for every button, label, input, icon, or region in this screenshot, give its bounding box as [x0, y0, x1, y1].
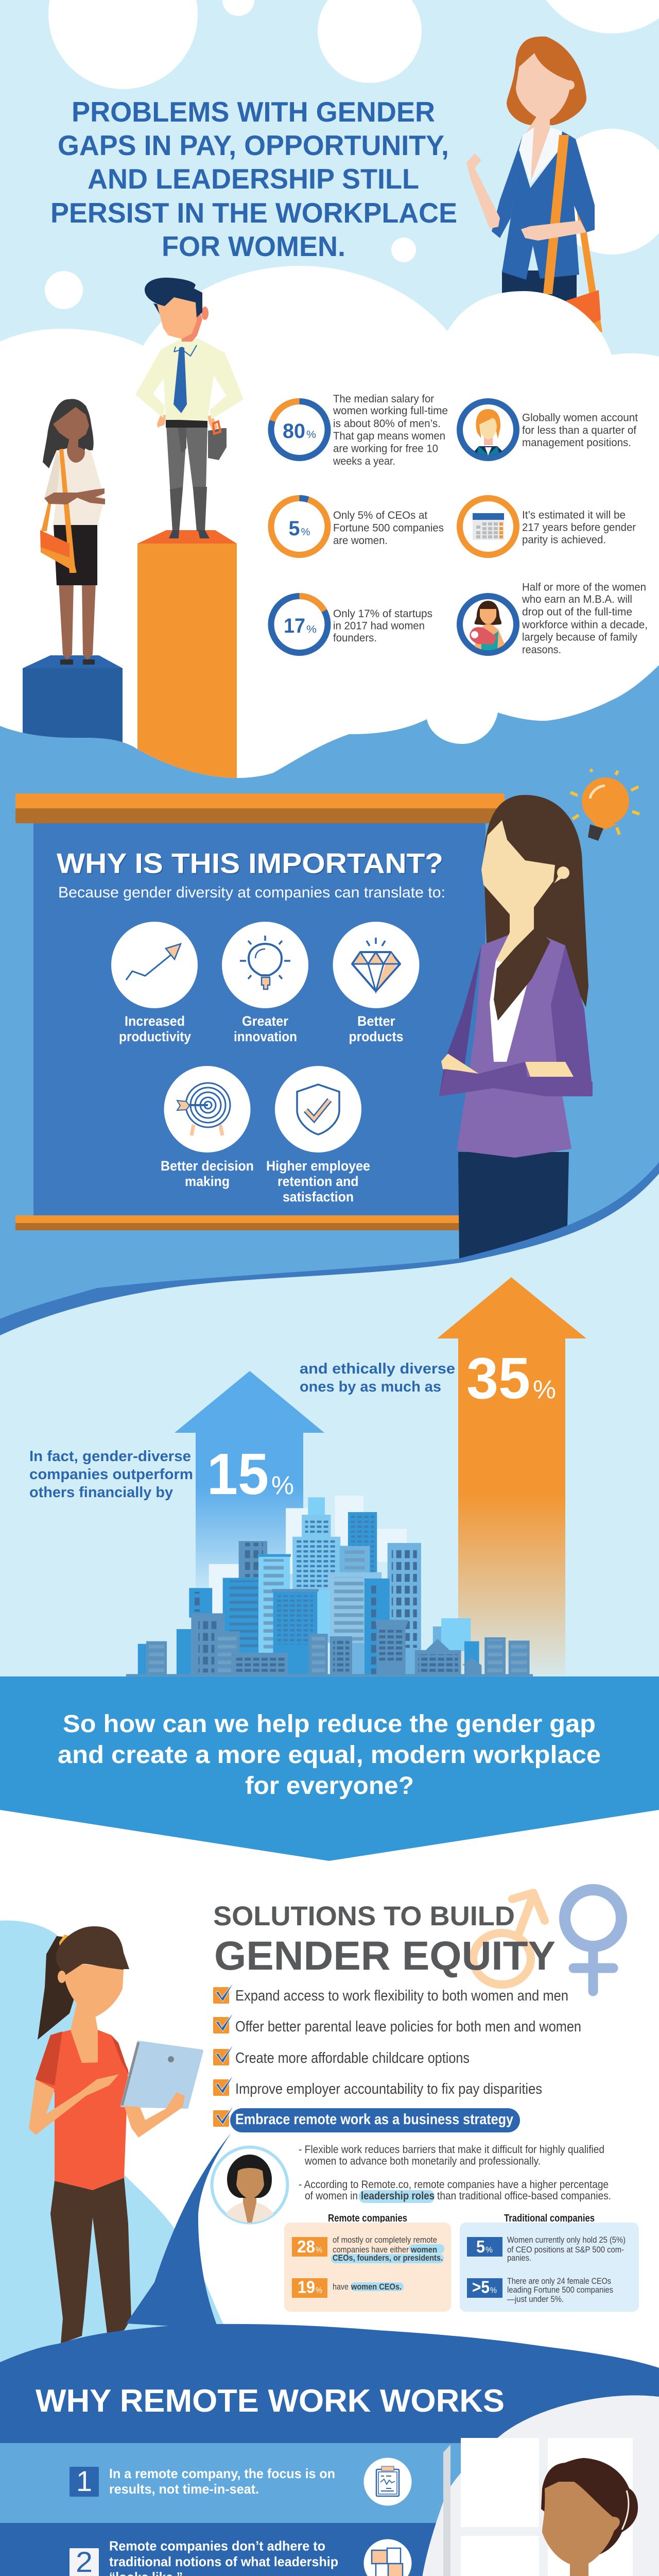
- reason 1: In a remote company, the focus is on: [109, 2466, 335, 2481]
- heading: solutions: [213, 1890, 621, 1991]
- number: 15 percent: %: [271, 1471, 294, 1500]
- panel: traditional companies: leading Fortune 500 companies: [507, 2285, 613, 2295]
- strap: [59, 449, 76, 573]
- check item 2: [213, 2011, 581, 2035]
- text: flexible work bullets: than traditional office-based companies.: [437, 2190, 611, 2202]
- reason 1: results, not time-in-seat.: [109, 2481, 259, 2497]
- text: management positions: Globally women account: [522, 412, 638, 423]
- icon: woman manager ring: [460, 401, 516, 459]
- illustration: city skyline: [126, 1496, 533, 1676]
- title: FOR WOMEN.: [162, 230, 345, 262]
- neck: [67, 438, 85, 463]
- icon: puzzle: [363, 2539, 412, 2576]
- stat: 5 percent ring: %: [301, 527, 310, 538]
- text: median salary: The median salary for: [333, 393, 434, 405]
- text: MBA drop out: reasons.: [522, 644, 561, 656]
- text: management positions: for less than a quarter of: [522, 425, 636, 436]
- panel: remote companies: [284, 2213, 451, 2312]
- banner: reduce the gender gap: So how can we help reduce the gender gap: [63, 1710, 596, 1738]
- text: gender parity: 217 years before gender: [522, 521, 636, 534]
- label: products: [349, 1013, 404, 1044]
- hair: [43, 399, 94, 468]
- check item 3: [213, 2043, 470, 2066]
- hands: [157, 414, 166, 428]
- panel: traditional companies: of CEO positions at S&P 500 com-: [507, 2245, 624, 2255]
- text: median salary: is about 80% of men’s.: [333, 418, 441, 430]
- reason 1: 1: [76, 2465, 92, 2497]
- wedge: blue swoosh: [126, 2133, 231, 2329]
- podium columns: [23, 530, 237, 792]
- text: flexible work bullets: of women in: [305, 2190, 358, 2202]
- check item 2: Offer better parental leave policies for both men and women: [235, 2019, 581, 2035]
- text: flexible work bullets: [299, 2144, 611, 2203]
- panel: traditional companies: panies.: [507, 2253, 531, 2263]
- panel: remote companies: 19: [298, 2277, 315, 2297]
- checklist: [213, 1981, 581, 2132]
- text: gender-diverse: [29, 1448, 193, 1501]
- text: gender-diverse: In fact, gender-diverse: [29, 1448, 191, 1465]
- icon: female symbol: [565, 1890, 621, 1991]
- label: retention: [266, 1158, 370, 1205]
- text: ethnically diverse: ones by as much as: [300, 1379, 441, 1395]
- title: AND LEADERSHIP STILL: [88, 163, 419, 195]
- shirt: [135, 338, 244, 421]
- panel: remote companies: 28: [297, 2237, 315, 2256]
- panel: remote companies: Remote companies: [328, 2213, 407, 2224]
- crossed arms: [44, 488, 105, 504]
- briefcase: [208, 428, 227, 460]
- face: [153, 303, 164, 316]
- check item 5 highlighted: Embrace remote work as a business strategy: [235, 2111, 513, 2128]
- icon: productivity arrow: [111, 922, 198, 1008]
- text: CEOs: Only 5% of CEOs at: [333, 510, 427, 521]
- stat: 5 percent ring: 5: [288, 517, 300, 540]
- label: productivity: [119, 1013, 191, 1044]
- bag: [40, 532, 77, 573]
- icon: decision target: [164, 1066, 250, 1153]
- tie: [174, 347, 187, 413]
- text: MBA drop out: [522, 581, 648, 656]
- label: decision making: making: [185, 1174, 230, 1189]
- text: MBA drop out: Half or more of the women: [522, 581, 646, 594]
- panel: traditional companies: There are only 24 female CEOs: [507, 2277, 611, 2286]
- text: ethnically diverse: and ethically diverse: [300, 1361, 455, 1377]
- panel: remote companies: CEOs, founders, or presidents.: [333, 2253, 443, 2263]
- number: 35 percent: 35: [466, 1346, 530, 1411]
- panel: remote companies: have: [333, 2282, 349, 2292]
- label: innovation: Greater: [242, 1013, 288, 1029]
- reason 1: [70, 2465, 335, 2497]
- neck: [182, 302, 202, 342]
- text: startups: Only 17% of startups: [333, 608, 432, 620]
- check item 4: Improve employer accountability to fix pay disparities: [235, 2081, 542, 2097]
- text: gender-diverse: others financially by: [29, 1484, 173, 1501]
- label: decision making: [161, 1158, 254, 1189]
- label: products: products: [349, 1029, 404, 1044]
- text: MBA drop out: largely because of family: [522, 632, 637, 643]
- face: [53, 407, 89, 440]
- text: gender-diverse: companies outperform: [29, 1466, 193, 1483]
- icon: orange lightbulb: [570, 769, 639, 841]
- label: retention: satisfaction: [283, 1189, 354, 1205]
- arrow: 15 percent blue: [175, 1371, 324, 1602]
- heading shadow: WHY IS THIS IMPORTANT?: [58, 848, 444, 880]
- stat: 80 percent ring: [264, 394, 335, 465]
- icon: products diamond: [333, 922, 419, 1008]
- text: median salary: are working for free 10: [333, 443, 438, 454]
- text: startups: in 2017 had women: [333, 620, 425, 632]
- stat: 80 percent ring: %: [306, 429, 316, 440]
- icon: calendar ring: [460, 498, 516, 555]
- label: innovation: [234, 1013, 297, 1044]
- section: why remote work works background: [0, 2324, 659, 2576]
- legs: [59, 582, 74, 660]
- banner: reduce the gender gap: [0, 1676, 659, 1861]
- label: productivity: productivity: [119, 1029, 191, 1044]
- panel: remote companies: %: [316, 2246, 322, 2255]
- label: retention: retention and: [278, 1174, 358, 1189]
- title: GAPS IN PAY, OPPORTUNITY,: [58, 129, 449, 161]
- hair: [145, 278, 202, 317]
- text: median salary: women working full-time: [333, 405, 448, 417]
- arrow: 35 percent orange: [437, 1277, 586, 1676]
- shape: light blue behind woman: [0, 1921, 229, 2370]
- check item 1: Expand access to work flexibility to both women and men: [235, 1988, 568, 2004]
- text: median salary: That gap means women: [333, 430, 445, 442]
- label: innovation: innovation: [234, 1029, 297, 1044]
- text: median salary: weeks a year.: [333, 455, 395, 467]
- text: CEOs: Fortune 500 companies: [333, 522, 444, 534]
- text: flexible work bullets: - According to Remote.co, remote companies have a higher percentage: [299, 2179, 609, 2191]
- illustration: woman in purple blazer: [439, 795, 593, 1262]
- panel: remote companies: of mostly or completely remote: [333, 2235, 437, 2245]
- panel: traditional companies: —just under 5%.: [507, 2295, 564, 2304]
- panel: traditional companies: [460, 2213, 639, 2312]
- illustration: woman with tablet: [29, 1926, 202, 2344]
- panel: remote companies: companies have either: [333, 2245, 409, 2255]
- wave divider: [0, 1162, 659, 1680]
- avatar: woman portrait: [212, 2147, 287, 2226]
- text: gender parity: It’s estimated it will be: [522, 509, 626, 521]
- illustration: woman with shoulder bag: [466, 37, 602, 332]
- panel: traditional companies: %: [490, 2286, 497, 2295]
- panel: remote companies: %: [316, 2286, 322, 2295]
- reason 2: traditional notions of what leadership: [109, 2554, 338, 2569]
- title: [50, 96, 457, 262]
- check item 1: [213, 1981, 568, 2004]
- hero background: [0, 0, 659, 732]
- title: PROBLEMS WITH GENDER: [72, 96, 435, 128]
- text: flexible work bullets: - Flexible work reduces barriers that make it difficult for highly qualified: [299, 2144, 604, 2156]
- panel: traditional companies: %: [485, 2246, 493, 2255]
- legs: [166, 426, 207, 531]
- panel: why is this important: [15, 793, 505, 1230]
- number: 15 percent: 15: [207, 1442, 269, 1506]
- text: MBA drop out: who earn an M.B.A. will: [522, 594, 632, 605]
- title: PERSIST IN THE WORKPLACE: [50, 197, 457, 229]
- reason 2: [70, 2538, 338, 2576]
- panel: traditional companies: 5: [476, 2237, 485, 2256]
- icon: clipboard: [363, 2458, 412, 2506]
- label: decision making: Better decision: [161, 1158, 254, 1174]
- skirt: [54, 524, 97, 585]
- label: products: Better: [357, 1013, 395, 1029]
- illustration: woman on short podium: [40, 399, 105, 665]
- check item 4: [213, 2074, 542, 2097]
- heading foreground: WHY IS THIS IMPORTANT?: [57, 847, 443, 879]
- text: startups: founders.: [333, 632, 377, 644]
- heading text: SOLUTIONS TO BUILD: [213, 1901, 515, 1931]
- stat: 5 percent ring: [271, 498, 327, 555]
- stat: 17 percent ring: %: [306, 624, 317, 635]
- stat: 80 percent ring: 80: [283, 420, 305, 443]
- belt: [166, 420, 207, 428]
- text: gender parity: parity is achieved.: [522, 534, 606, 546]
- text: gender parity: [522, 509, 636, 546]
- text: MBA drop out: drop out of the full-time: [522, 606, 632, 618]
- stat: 17 percent ring: 17: [284, 615, 305, 637]
- heading text: GENDER EQUITY: [214, 1933, 556, 1978]
- text: median salary: [333, 393, 448, 467]
- text: ethnically diverse: [300, 1361, 455, 1395]
- check item 3: Create more affordable childcare options: [235, 2050, 470, 2066]
- text: flexible work bullets: women to advance both monetarily and professionally.: [304, 2156, 541, 2167]
- text: management positions: [522, 412, 638, 449]
- heading text: [213, 1901, 556, 1978]
- check item 5 highlighted: [213, 2105, 520, 2132]
- subheading: Because gender diversity at companies can translate to:: [58, 884, 445, 901]
- stat: 17 percent ring: [271, 596, 327, 653]
- banner: reduce the gender gap: for everyone?: [245, 1772, 414, 1800]
- top: [44, 448, 103, 525]
- banner: reduce the gender gap: and create a more equal, modern workplace: [58, 1741, 601, 1769]
- collar: [174, 345, 197, 356]
- illustration: man on tall podium: [135, 278, 244, 538]
- heading: why remote work works: WHY REMOTE WORK WORKS: [36, 2383, 505, 2419]
- text: management positions: management positions.: [522, 437, 631, 449]
- panel: traditional companies: Traditional companies: [504, 2213, 595, 2224]
- text: startups: [333, 608, 432, 644]
- text: MBA drop out: workforce within a decade,: [522, 619, 648, 631]
- panel: traditional companies: >5: [472, 2277, 490, 2297]
- text: CEOs: [333, 510, 444, 547]
- white cloud and blue section: [0, 266, 659, 1319]
- panel: remote companies: women CEOs.: [351, 2282, 402, 2292]
- label: productivity: Increased: [125, 1013, 185, 1029]
- reason 2: Remote companies don’t adhere to: [109, 2538, 325, 2553]
- icon: retention shield: [275, 1066, 361, 1153]
- panel: traditional companies: Women currently only hold 25 (5%): [507, 2235, 626, 2245]
- text: flexible work bullets: leadership roles: [361, 2190, 435, 2202]
- icon: innovation bulb: [222, 922, 308, 1008]
- label: retention: Higher employee: [266, 1158, 370, 1174]
- icon: mother and baby ring: [460, 596, 516, 653]
- icon: male symbol: [473, 1893, 545, 1985]
- number: 35 percent: %: [533, 1375, 556, 1404]
- panel: remote companies: women: [410, 2245, 437, 2255]
- text: CEOs: are women.: [333, 535, 388, 547]
- illustration: remote worker at window: [418, 2395, 659, 2576]
